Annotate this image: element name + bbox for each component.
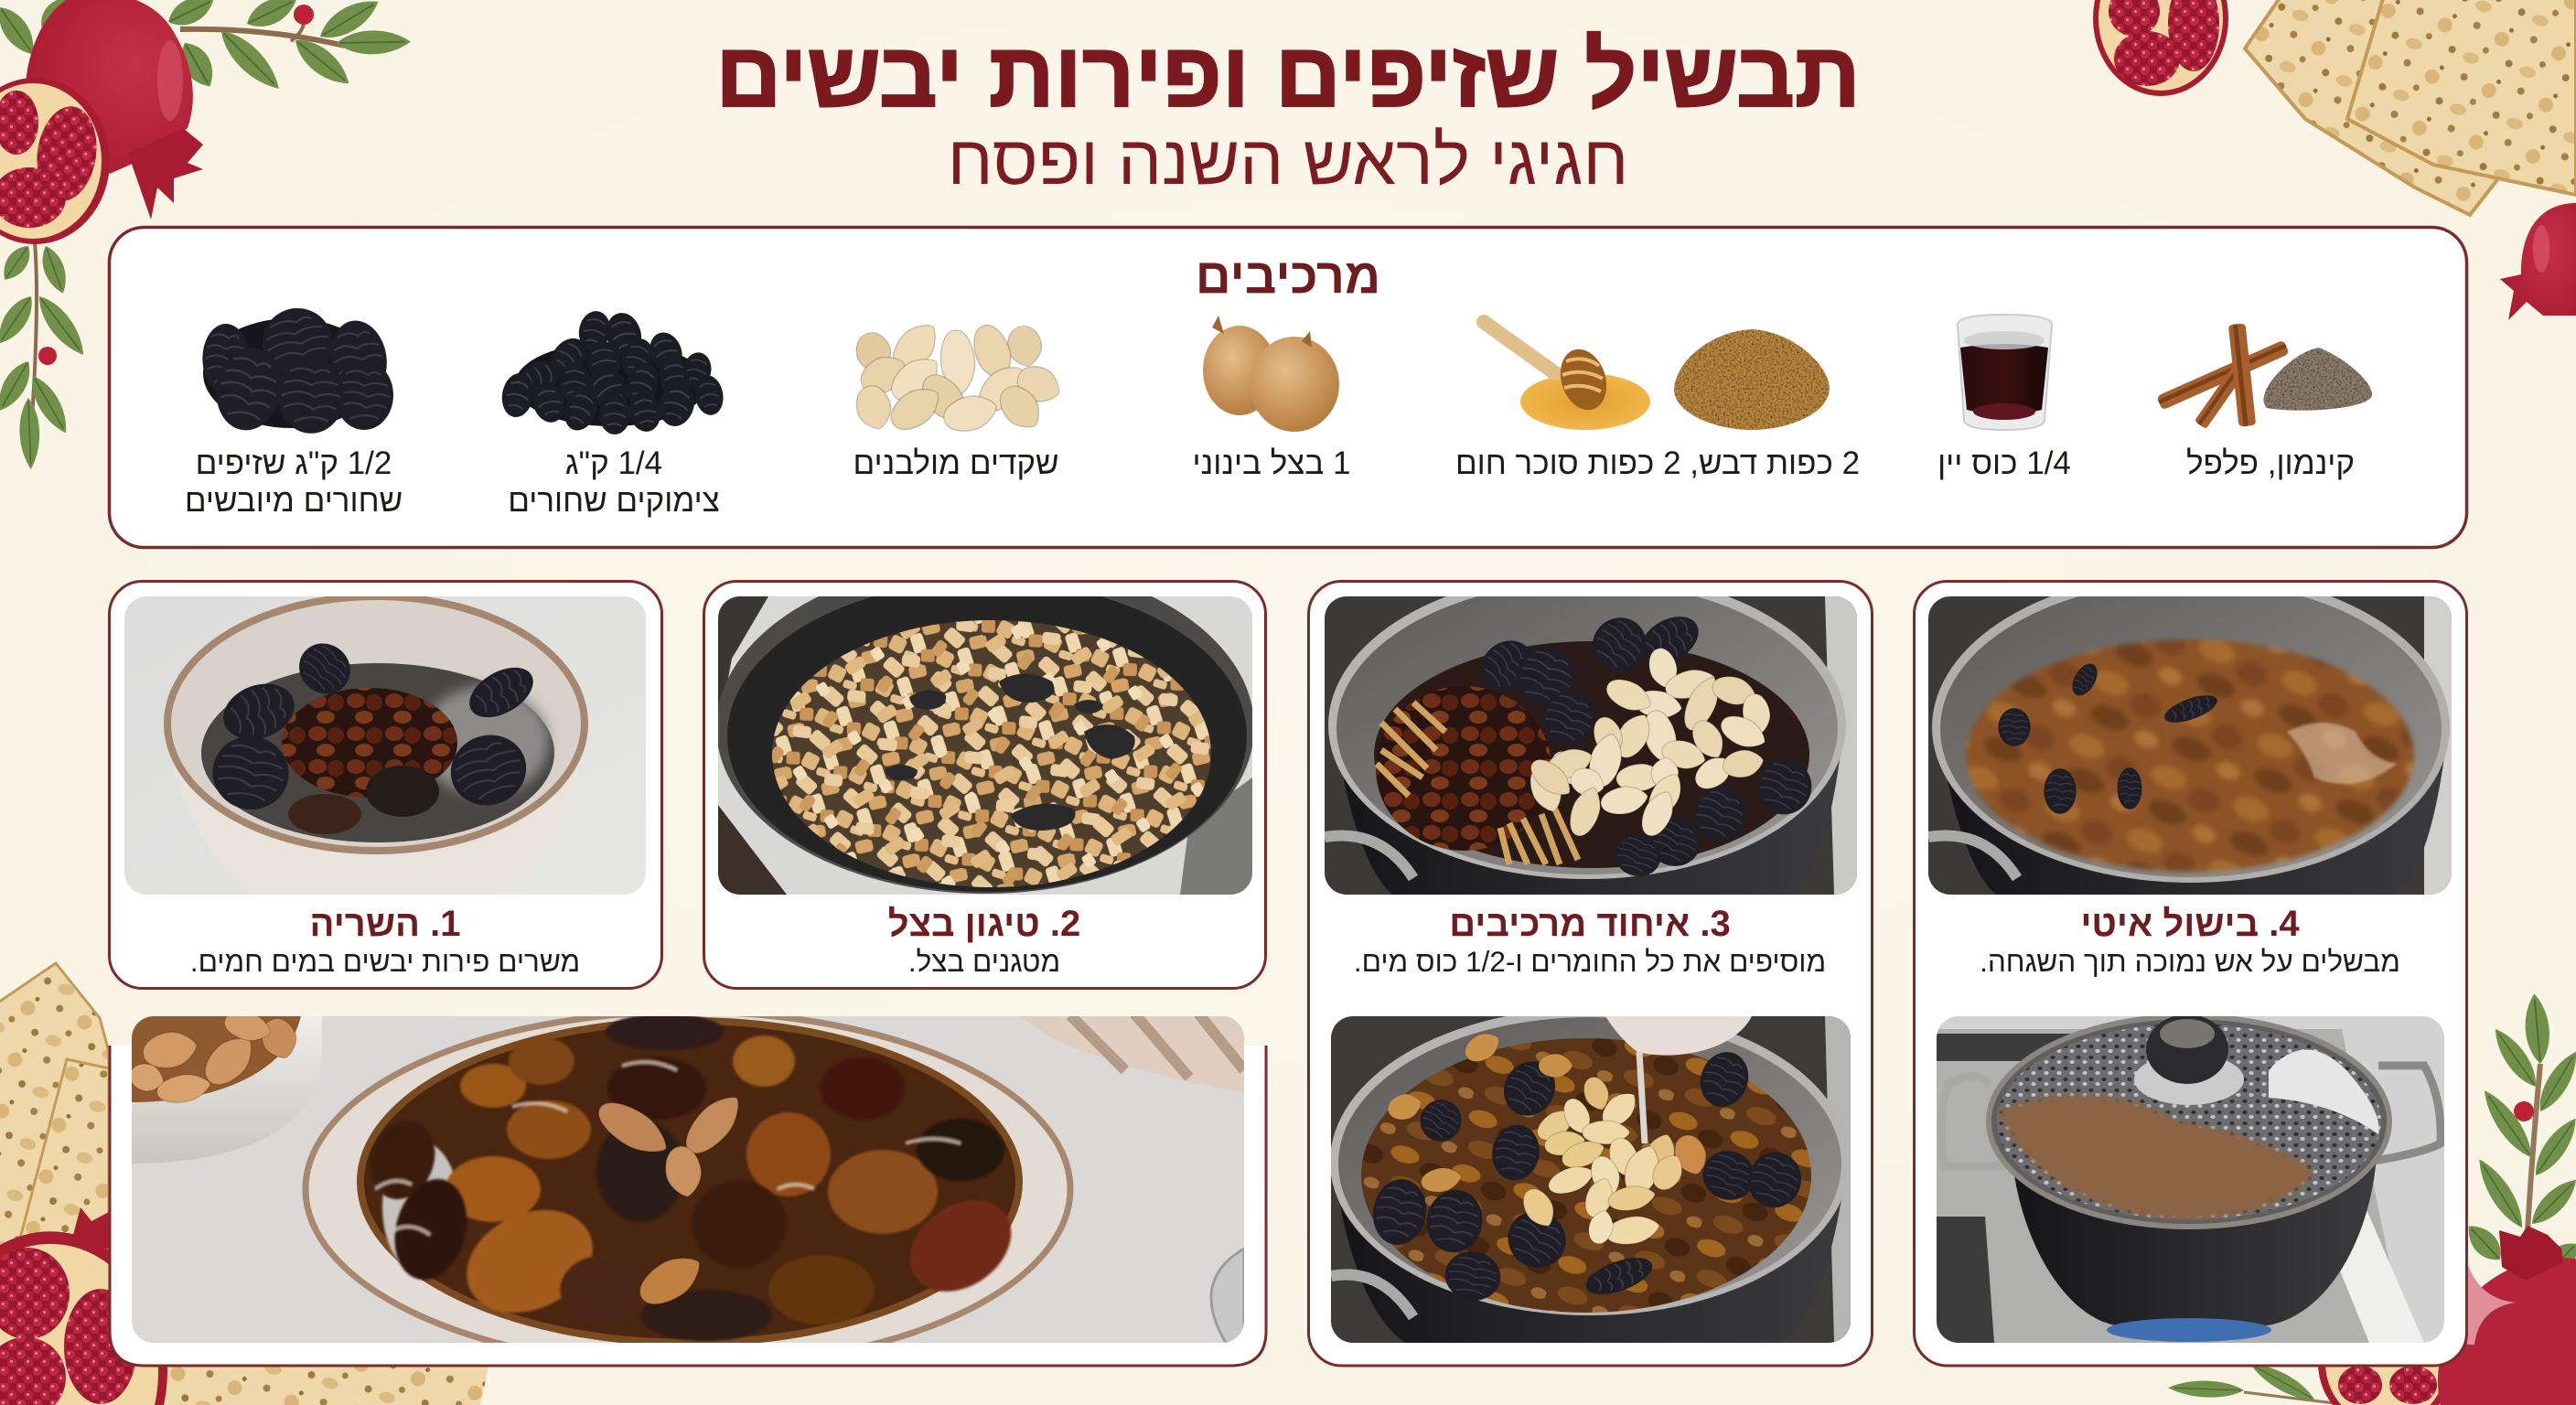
step title: 4. בישול איטי [2080,904,2300,944]
step title: 3. איחוד מרכיבים [1449,904,1731,944]
step description: משרים פירות יבשים במים חמים. [190,945,580,978]
subtitle: חגיגי לראש השנה ופסח [948,122,1628,199]
photo: soaking fruit in bowl [124,596,646,901]
label: cinnamon, pepper: קינמון, פלפל [2186,445,2355,481]
photo: finished stew in bowl [127,1007,1249,1367]
label: raisins: 1/4 ק"ג [565,445,662,481]
icon: blanched almonds [851,316,1066,438]
label: prunes: 1/2 ק"ג שזיפים [196,445,392,481]
panel: step 3 combining [1308,572,1872,1366]
step description: מטגנים בצל. [908,945,1060,978]
decoration: bottom-right branch and pomegranate [2168,992,2576,1405]
panel: final dish [110,1007,1266,1367]
decoration: top-left pomegranate and branches [0,0,411,469]
heading: ingredients: מרכיבים [1196,249,1380,304]
icon: brown sugar [1674,329,1830,430]
panel: ingredients [110,227,2466,547]
step description: מבשלים על אש נמוכה תוך השגחה. [1980,945,2400,978]
label: prunes: שחורים מיובשים [185,483,402,519]
label: honey and sugar: 2 כפות דבש, 2 כפות סוכר חום [1455,445,1860,481]
icon: ground pepper [2228,323,2372,427]
panel: step 4 slow cooking [1914,572,2466,1366]
icon: cinnamon sticks [2156,340,2290,429]
photo: stew simmering in pot [1928,572,2452,901]
step description: מוסיפים את כל החומרים ו-1/2 כוס מים. [1354,945,1826,978]
label: raisins: צימוקים שחורים [508,483,720,519]
label: almonds: שקדים מולבנים [853,445,1059,481]
panel: step 1 soaking [110,582,662,988]
label: prunes [185,445,402,519]
panel: step 2 frying onion [704,561,1266,988]
icon: black raisins [499,308,726,435]
photo: ingredients in pot [1325,572,1857,901]
icon: dried prunes [202,300,393,435]
title: תבשיל שזיפים ופירות יבשים [715,24,1861,126]
decoration: top-right matzah and pomegranates [2093,0,2576,320]
photo: onion in pan [718,596,1252,895]
icon: honey [1484,322,1650,430]
label: wine: 1/4 כוס יין [1937,445,2071,481]
photo: covered pot on stove [1937,1014,2444,1343]
label: onion: 1 בצל בינוני [1193,445,1350,481]
step title: 2. טיגון בצל [888,904,1080,944]
step title: 1. השריה [309,904,461,944]
photo: adding water to pot [1330,1008,1851,1349]
icon: onions [1203,316,1339,432]
decoration: bottom-left matzah and pomegranate [0,963,489,1405]
label: raisins [508,445,720,519]
icon: glass of wine [1958,315,2052,430]
